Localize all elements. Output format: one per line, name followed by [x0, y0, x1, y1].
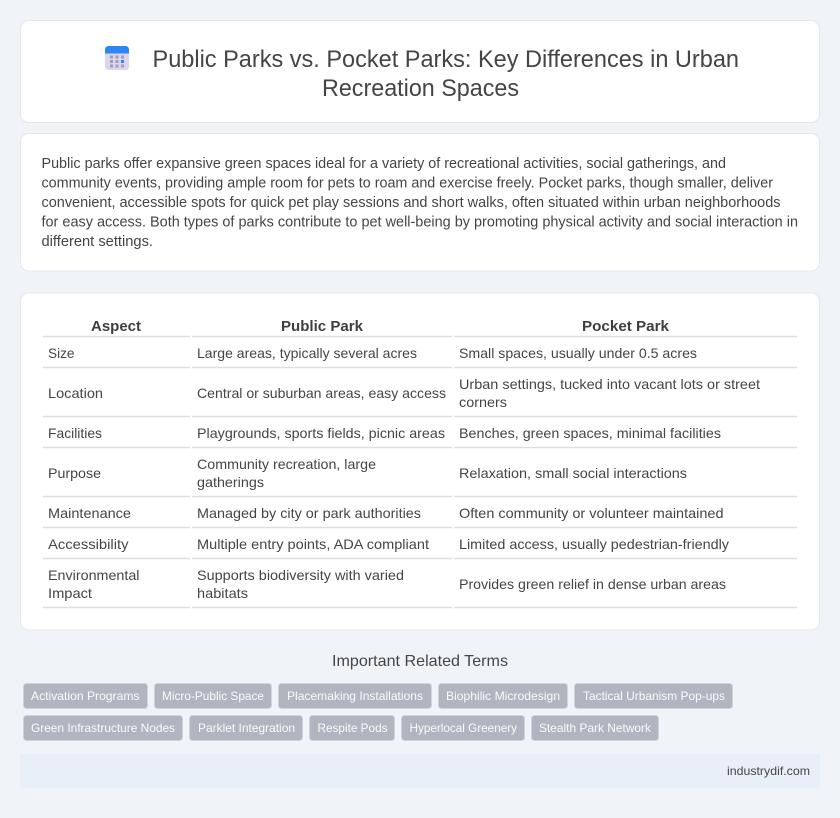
- paragraph: convenient, accessible spots for quick pet play sessions and short walks, often situated within urban neighborhoods: [42, 195, 780, 211]
- panel: comparison table: [20, 293, 820, 630]
- icon: calendar: [105, 46, 129, 70]
- row: maintenance: [48, 505, 724, 521]
- row: environmental impact: Provides green relief in dense urban areas: [459, 576, 726, 592]
- row: environmental impact: [48, 567, 726, 601]
- paragraph: Public parks offer expansive green spaces ideal for a variety of recreational activities, social gatherings, and: [42, 156, 726, 172]
- section: related terms: [24, 653, 732, 740]
- tag: Stealth Park Network: [532, 716, 658, 740]
- tag: Green Infrastructure Nodes: [24, 716, 182, 740]
- row: environmental impact: Impact: [48, 585, 92, 601]
- tag: Micro-Public Space: Micro-Public Space: [162, 689, 264, 703]
- title: [152, 46, 739, 102]
- tag: Biophilic Microdesign: [438, 684, 568, 708]
- tag: Respite Pods: [310, 716, 394, 740]
- tag: Micro-Public Space: [154, 684, 272, 708]
- row: accessibility: Multiple entry points, ADA compliant: [197, 536, 429, 552]
- panel: summary text: [20, 134, 820, 271]
- row: purpose: Community recreation, large: [197, 456, 376, 472]
- table header row: Pocket Park: [582, 319, 670, 335]
- tag: Placemaking Installations: Placemaking Installations: [287, 689, 423, 703]
- row: size: Large areas, typically several acres: [197, 345, 417, 361]
- table header row: Aspect: [91, 319, 141, 335]
- tag: Activation Programs: [24, 684, 148, 708]
- title: Recreation Spaces: [322, 75, 519, 102]
- row: facilities: [48, 425, 721, 441]
- row: size: Small spaces, usually under 0.5 acres: [459, 345, 697, 361]
- tag: Tactical Urbanism Pop-ups: Tactical Urbanism Pop-ups: [583, 689, 725, 703]
- row: facilities: Benches, green spaces, minimal facilities: [459, 425, 721, 441]
- row: environmental impact: habitats: [197, 585, 248, 601]
- row: location: [48, 376, 760, 410]
- tag: Hyperlocal Greenery: [402, 716, 524, 740]
- row: purpose: Purpose: [48, 465, 101, 481]
- row: location: Urban settings, tucked into vacant lots or street: [459, 376, 760, 392]
- table header row: [91, 319, 670, 335]
- tag: Tactical Urbanism Pop-ups: [574, 684, 732, 708]
- row: accessibility: Limited access, usually pedestrian-friendly: [459, 536, 729, 552]
- panel: header: [20, 20, 820, 122]
- row: facilities: Playgrounds, sports fields, picnic areas: [197, 425, 445, 441]
- row: purpose: Relaxation, small social interactions: [459, 465, 687, 481]
- row: environmental impact: Supports biodiversity with varied: [197, 567, 404, 583]
- row: accessibility: [48, 536, 729, 552]
- row: size: [48, 345, 697, 361]
- paragraph: different settings.: [42, 234, 153, 250]
- row: size: Size: [48, 345, 75, 361]
- paragraph: [42, 156, 798, 250]
- tag: Green Infrastructure Nodes: Green Infrastructure Nodes: [31, 721, 175, 735]
- footer: industrydif.com: [727, 764, 810, 778]
- tag: Hyperlocal Greenery: Hyperlocal Greenery: [410, 721, 517, 735]
- paragraph: for easy access. Both types of parks contribute to pet well-being by promoting physical activity and social interaction in: [42, 214, 798, 230]
- row: location: Location: [48, 385, 103, 401]
- table header row: Public Park: [281, 319, 364, 335]
- heading: Important Related Terms: [332, 653, 508, 670]
- tag: Biophilic Microdesign: Biophilic Microdesign: [446, 689, 560, 703]
- row: location: Central or suburban areas, easy access: [197, 385, 446, 401]
- row: maintenance: Managed by city or park authorities: [197, 505, 421, 521]
- tag: Parklet Integration: [190, 716, 302, 740]
- tag: Stealth Park Network: Stealth Park Network: [539, 721, 652, 735]
- row: environmental impact: Environmental: [48, 567, 140, 583]
- row: maintenance: Maintenance: [48, 505, 131, 521]
- row: accessibility: Accessibility: [48, 536, 128, 552]
- row: purpose: [48, 456, 687, 490]
- tag: Activation Programs: Activation Programs: [31, 689, 140, 703]
- row: maintenance: Often community or volunteer maintained: [459, 505, 724, 521]
- row: location: corners: [459, 394, 507, 410]
- paragraph: community events, providing ample room for pets to roam and exercise freely. Pocket parks, though smaller, deliver: [42, 176, 773, 192]
- row: purpose: gatherings: [197, 474, 264, 490]
- tag: Parklet Integration: Parklet Integration: [198, 721, 295, 735]
- title: Public Parks vs. Pocket Parks: Key Differences in Urban: [152, 46, 739, 73]
- footer: [20, 754, 820, 788]
- tag: Respite Pods: Respite Pods: [318, 721, 388, 735]
- row: facilities: Facilities: [48, 425, 102, 441]
- tag: Placemaking Installations: [278, 684, 432, 708]
